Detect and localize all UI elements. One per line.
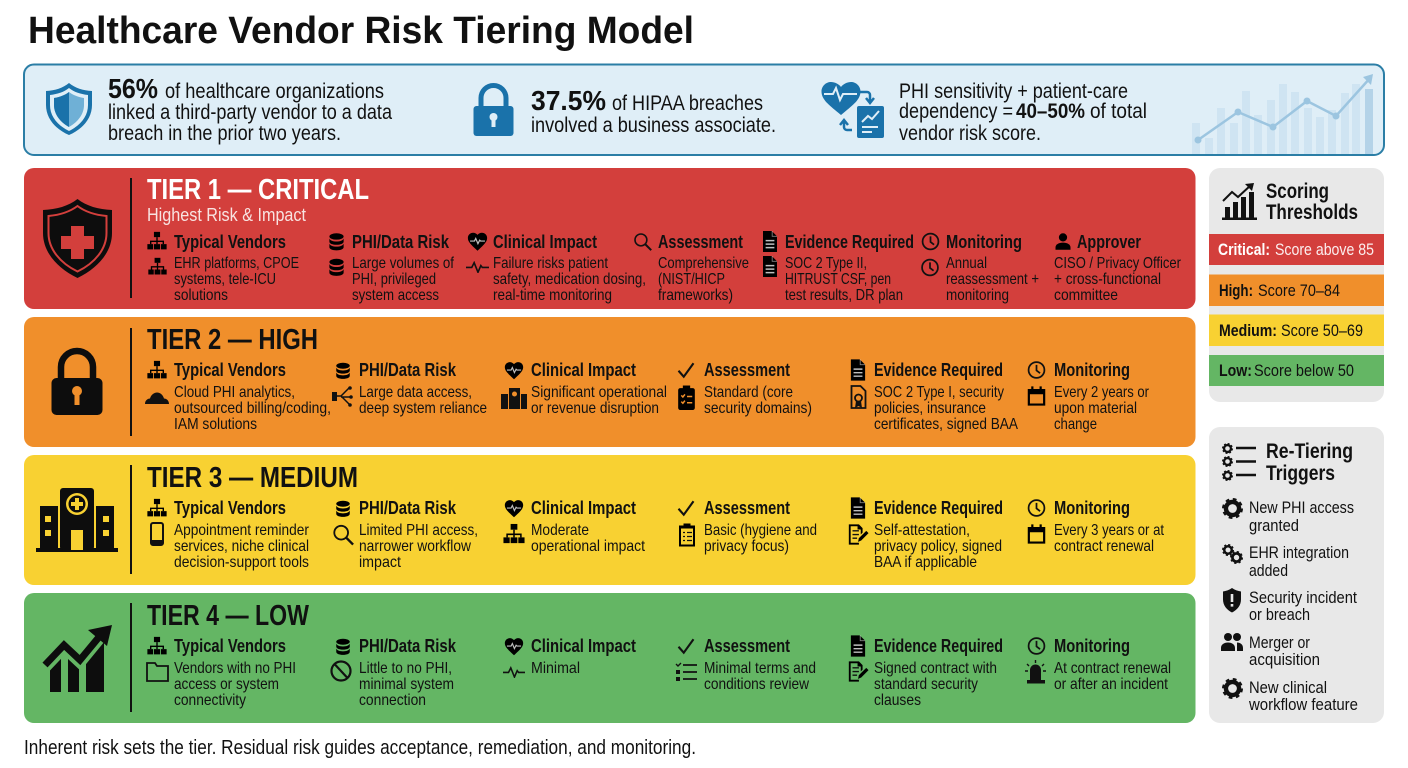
column: monitoring [1028,359,1150,433]
column: typical vendors [147,635,296,709]
column: approver: CISO / Privacy Officer [1054,255,1182,272]
trigger: new clinical workflow: New clinical [1249,678,1327,697]
column: clinical impact [501,359,667,417]
threshold: critical: Critical: [1218,240,1270,259]
icon: padlock [52,351,102,415]
column: evidence required: clauses [874,692,921,709]
threshold: medium [1209,314,1384,346]
column: monitoring: reassessment + [946,271,1039,288]
column: typical vendors: Cloud PHI analytics, [174,384,295,401]
trigger: new clinical workflow: workflow feature [1248,695,1358,714]
trigger: new PHI access: New PHI access [1249,498,1354,517]
icon: hospital [36,488,118,552]
column: clinical impact: Moderate [531,522,589,539]
column: evidence required: Self-attestation, [874,522,970,539]
threshold: critical: Score above 85 [1275,240,1374,259]
column: PHI data risk [332,635,457,709]
column: evidence required: Evidence Required [874,497,1003,518]
trigger: EHR integration: EHR integration [1249,543,1349,562]
column: PHI data risk: Large data access, [359,384,472,401]
column: PHI data risk: deep system reliance [359,400,487,417]
column: assessment: Basic (hygiene and [704,522,817,539]
heading: scoring thresholds: Scoring [1266,179,1329,203]
stat: 56 percent [108,73,392,145]
stat: 40 to 50 percent of score: of total [1090,99,1147,123]
panel: tier 2 high [24,317,1196,447]
column: clinical impact: or revenue disruption [531,400,659,417]
column: assessment: Minimal terms and [704,660,816,677]
column: assessment: (NIST/HICP [658,271,725,288]
column: assessment [676,635,816,693]
chart: decorative bars and trend line [1192,74,1373,154]
panel: key statistics banner [24,64,1384,155]
panel: tier 4 low [24,593,1196,723]
column: monitoring: monitoring [946,287,1009,304]
icon: blue padlock [474,85,514,136]
column: monitoring: Every 3 years or at [1054,522,1164,539]
column: clinical impact [503,497,645,555]
threshold: high [1209,274,1384,306]
stat: 56 percent: breach in the prior two years. [108,121,341,145]
stat: 56 percent: 56% [108,73,158,104]
column: assessment: Assessment [704,497,790,518]
column: typical vendors: connectivity [174,692,246,709]
column: monitoring: contract renewal [1054,538,1154,555]
column: assessment: conditions review [704,676,809,693]
column: assessment: Assessment [704,359,790,380]
heading: scoring thresholds [1266,179,1358,224]
column: typical vendors: IAM solutions [174,416,257,433]
column: monitoring: Annual [946,255,987,272]
column: clinical impact: Significant operational [531,384,667,401]
column: evidence required: test results, DR plan [785,287,903,304]
column: PHI data risk: system access [352,287,439,304]
column: monitoring: Monitoring [946,231,1022,252]
stat: 40 to 50 percent of score: PHI sensitivity + patient-care [899,79,1128,103]
column: evidence required: SOC 2 Type II, [785,255,867,272]
column: clinical impact: Failure risks patient [493,255,608,272]
trigger: merger or acquisition [1221,633,1320,669]
column: PHI data risk: Large volumes of [352,255,454,272]
column: PHI data risk [329,231,454,304]
column: evidence required: standard security [874,676,978,693]
column: evidence required: policies, insurance [874,400,986,417]
column: clinical impact: Clinical Impact [493,231,597,252]
column: evidence required: Signed contract with [874,660,997,677]
subheading: highest risk: Highest Risk & Impact [147,205,306,225]
trigger: merger or acquisition: Merger or [1249,633,1310,652]
column: evidence required [849,497,1003,571]
column: typical vendors: EHR platforms, CPOE [174,255,299,272]
threshold: medium: Score 50–69 [1281,321,1363,340]
heading: re-tiering triggers [1266,439,1353,485]
column: typical vendors [145,359,331,433]
column: monitoring [1028,497,1164,555]
column: evidence required: certificates, signed BAA [874,416,1018,433]
column: evidence required: HITRUST CSF, pen [785,271,891,288]
icon: blue shield [46,83,92,135]
threshold: high: High: [1219,281,1253,300]
column: evidence required: BAA if applicable [874,554,977,571]
icon: shield with cross [43,199,112,278]
column: evidence required: Evidence Required [785,231,914,252]
column: PHI data risk: PHI/Data Risk [359,359,457,380]
threshold: low [1209,355,1384,386]
threshold: low: Score below 50 [1254,361,1354,380]
column: monitoring [1025,635,1171,693]
column: evidence required: Evidence Required [874,359,1003,380]
heading: tier 4: TIER 4 — LOW [147,600,310,632]
column: assessment [678,497,817,555]
threshold: medium: Medium: [1219,321,1277,340]
column: approver: + cross-functional [1054,271,1161,288]
column: typical vendors [147,231,299,304]
column: monitoring: At contract renewal [1054,660,1171,677]
column: evidence required: privacy policy, signed [874,538,1002,555]
column: clinical impact: Clinical Impact [531,497,636,518]
stat: 40 to 50 percent of score: 40–50% [1016,99,1085,123]
icon: scoring chart [1222,183,1257,220]
column: typical vendors: solutions [174,287,228,304]
column: PHI data risk: Limited PHI access, [359,522,478,539]
column: typical vendors: services, niche clinical [174,538,309,555]
stat: 40 to 50 percent of score: vendor risk score. [899,121,1041,145]
column: assessment [635,231,749,304]
trigger: new PHI access: granted [1249,516,1299,535]
column: clinical impact: Clinical Impact [531,635,636,656]
trigger: new clinical workflow [1223,678,1358,714]
column: assessment: Assessment [658,231,743,252]
column: assessment: security domains) [704,400,812,417]
stat: 37.5 percent: 37.5% [531,85,606,116]
column: typical vendors: Typical Vendors [174,635,286,656]
column: PHI data risk: narrower workflow [359,538,471,555]
column: assessment: frameworks) [658,287,733,304]
column: monitoring: upon material [1054,400,1137,417]
column: PHI data risk: connection [359,692,426,709]
threshold: high: Score 70–84 [1258,281,1340,300]
column: evidence required [851,359,1018,433]
column: typical vendors [147,497,310,571]
column: PHI data risk: PHI/Data Risk [359,497,457,518]
icon: heart and document cycle [822,82,884,138]
column: PHI data risk: PHI, privileged [352,271,436,288]
column: PHI data risk: PHI/Data Risk [359,635,457,656]
column: assessment: Comprehensive [658,255,749,272]
column: monitoring: Monitoring [1054,635,1130,656]
column: typical vendors: systems, tele-ICU [174,271,276,288]
column: assessment [678,359,812,417]
column: evidence required: SOC 2 Type I, security [874,384,1004,401]
column: PHI data risk [332,359,487,417]
icon: rising chart with arrow [45,625,112,692]
column: clinical impact: Minimal [531,660,580,677]
column: typical vendors: Typical Vendors [174,359,286,380]
trigger: EHR integration: added [1249,561,1288,580]
column: typical vendors: Vendors with no PHI [174,660,296,677]
trigger: security incident [1223,588,1357,624]
trigger: security incident: Security incident [1249,588,1357,607]
column: typical vendors: Typical Vendors [174,231,286,252]
column: typical vendors: access or system [174,676,279,693]
column: monitoring [922,231,1039,304]
column: typical vendors: outsourced billing/coding, [174,400,331,417]
column: monitoring: Every 2 years or [1054,384,1150,401]
panel: re-tiering triggers [1209,427,1384,723]
panel: scoring thresholds [1209,168,1384,402]
column: monitoring: or after an incident [1054,676,1168,693]
column: clinical impact: Clinical Impact [531,359,636,380]
icon: trigger list [1223,444,1256,480]
column: assessment: Standard (core [704,384,793,401]
column: assessment: privacy focus) [704,538,789,555]
title: Healthcare Vendor Risk Tiering Model [28,10,694,52]
threshold: critical [1209,234,1384,265]
stat: 56 percent: of healthcare organizations [165,79,384,103]
trigger: new PHI access [1223,498,1354,535]
stat: 56 percent: linked a third-party vendor to a data [108,100,392,124]
column: evidence required [849,635,1003,709]
column: PHI data risk: Little to no PHI, [359,660,452,677]
column: PHI data risk: PHI/Data Risk [352,231,450,252]
panel: tier 1 critical [24,168,1196,309]
trigger: EHR integration [1223,543,1349,580]
threshold: low: Low: [1219,361,1252,380]
column: clinical impact [466,231,646,304]
column: PHI data risk [334,497,478,571]
column: typical vendors: decision-support tools [174,554,309,571]
column: clinical impact: safety, medication dosing, [493,271,646,288]
stat: 40 to 50 percent of score: dependency = [899,99,1013,123]
column: monitoring: change [1054,416,1097,433]
column: monitoring: Monitoring [1054,359,1130,380]
heading: tier 3: TIER 3 — MEDIUM [147,462,358,494]
column: clinical impact [503,635,636,677]
column: clinical impact: real-time monitoring [493,287,612,304]
trigger: merger or acquisition: acquisition [1249,650,1320,669]
heading: re-tiering triggers: Re-Tiering [1266,439,1353,463]
heading: tier 1: TIER 1 — CRITICAL [147,174,369,206]
stat: 40 to 50 percent of score [899,79,1147,145]
column: evidence required: Evidence Required [874,635,1003,656]
column: PHI data risk: impact [359,554,401,571]
column: PHI data risk: minimal system [359,676,454,693]
panel: tier 3 medium [24,455,1196,585]
column: typical vendors: Typical Vendors [174,497,286,518]
column: approver: Approver [1077,231,1141,252]
column: approver [1054,231,1182,304]
stat: 37.5 percent [531,85,776,137]
footer note: Inherent risk sets the tier. Residual risk guides acceptance, remediation, and monitoring. [24,737,696,759]
heading: re-tiering triggers: Triggers [1266,461,1335,485]
column: monitoring: Monitoring [1054,497,1130,518]
column: assessment: Assessment [704,635,790,656]
heading: scoring thresholds: Thresholds [1266,200,1358,224]
column: typical vendors: Appointment reminder [174,522,310,539]
heading: tier 2: TIER 2 — HIGH [147,324,318,356]
column: approver: committee [1054,287,1118,304]
trigger: security incident: or breach [1249,605,1310,624]
column: clinical impact: operational impact [531,538,645,555]
stat: 37.5 percent: involved a business associate. [531,113,776,137]
stat: 37.5 percent: of HIPAA breaches [612,91,763,115]
column: evidence required [763,231,914,304]
